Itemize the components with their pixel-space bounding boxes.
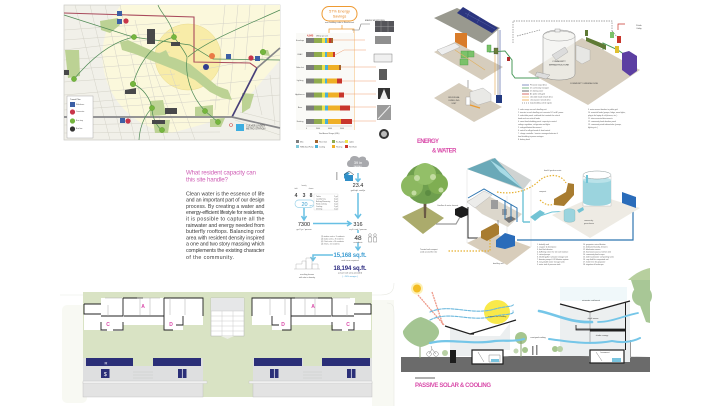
transit routes [64,5,280,140]
panel: site map [64,5,280,140]
unit letters: D [169,322,173,328]
density building icon: resulting homes [300,273,314,276]
diagram labels: compost [539,190,547,193]
lower left roofs: $ [104,372,107,378]
daily water pill [295,200,314,208]
blue pump box [622,192,636,208]
panel: energy savings chart [295,6,394,148]
wiring legend: load-shedding control signals [530,102,552,104]
resident icons [368,234,376,242]
savings bracket [329,25,354,130]
body paragraph: energy-efficient lifestyle for residents, [186,210,264,216]
rainfall cloud icon [347,156,369,168]
cyclist [427,346,438,356]
legend: Hot Water [349,146,357,148]
map street texture [64,5,280,140]
surrounding context [60,283,394,406]
annual water per person: 7300 [298,222,310,228]
energy notes: 9. main nearest breaker to public grid [588,108,618,111]
orange wall unit [455,33,467,48]
body paragraph: Clean water is the essence of life [186,192,265,198]
strategy thumbnails [352,20,394,139]
energy notes: 13. community wind turbine/solar (pumps, [588,123,622,126]
lower right roofs [249,358,372,397]
energy notes: 2. inverter in each dwelling unit converts DC to AC power [518,111,564,114]
section labels: shade canopy [596,335,608,337]
green units [460,45,491,65]
butterfly roof [467,158,531,190]
panel: water calculation flow [294,156,376,279]
community infrastructure tank [535,29,575,80]
lower left roofs [83,358,207,397]
section labels: rainwater catchment [582,299,600,302]
map legend: Commuter [76,110,85,113]
savings pill heading: over building code or Benchmark [325,22,354,24]
unit letters [106,304,350,328]
required roof area: roof area required [341,259,359,262]
annual water per person: gal / yr / person [296,228,312,231]
bars: 4,845 [307,34,314,38]
unit mix list: (4) 3 bdr = 21 residents [321,242,340,246]
battery equipment [466,88,502,108]
water notes [537,243,614,266]
lower floor plane [434,83,502,122]
legend: Cooling [319,146,325,148]
water use table: Drinking [316,208,322,210]
actual roof area [334,266,367,278]
wiring legend: selectable loads network (DC) [530,96,553,98]
diagram labels: Overflow & water harvest [437,204,459,207]
row 3 [306,65,341,70]
wiring legend [522,84,553,104]
brown greywater tank [481,223,499,241]
diagram labels: food & garden waste [544,169,561,172]
dwelling roof with solar panels [434,7,500,43]
water use table: Laundry Day [316,198,326,200]
energy notes: voltage regulation, refrigerator and lights [518,123,550,126]
water use icons: 3 [303,193,306,199]
legend: Heating [336,146,342,148]
metro station label: METRO STATION [246,128,266,130]
dark grey filter box [455,206,468,218]
actual roof area: actual roof area provided [338,272,363,274]
plane labels: INDIVIDUAL [448,96,461,99]
unit letters: A [141,304,145,310]
roof area per person: sq.ft. roof / person [349,228,368,231]
row 5 [306,92,344,98]
trees left [403,317,527,358]
section labels: basement [601,351,610,354]
dwelling system wiring [455,21,625,95]
fixtures [467,191,516,223]
strategy thumbnails: ENERGY MONITORING [365,20,385,22]
chart axis [306,126,352,135]
water use icons [294,184,314,199]
chart axis: 6000 [328,128,332,130]
energy notes [518,108,626,141]
body paragraph: process. By creating a water and [186,204,265,210]
sun rays [418,292,444,325]
water notes: 5. cistern/pumps [537,253,550,256]
rainfall cloud icon: 39 in [354,161,362,165]
legend: Misc [300,142,304,144]
plane labels: Utility [636,27,642,30]
energy notes: 11. interconnected disconnects [588,117,613,120]
central stair and courtyard [211,298,244,339]
water use icons: 4 [295,193,298,199]
plane labels: COMMUNITY GREENHOUSE [570,83,599,85]
upper left units [84,298,203,331]
diagram labels: greenhouse [584,222,594,225]
water use table: Bathing/Showering [316,200,330,203]
inverter controls [494,36,621,61]
energy notes: 1. solar arrays on each dwelling unit [518,108,547,111]
unit mix list [321,235,345,246]
map legend: Bus stop [76,119,83,122]
capacity question heading: What resident capacity can [186,170,257,176]
water notes: 9. water tank & pressure tank [537,263,560,266]
water notes: 16. crop field for composted soil [583,258,609,261]
rainfall yield: 23.4 [353,183,363,189]
required roof area [334,253,367,262]
energy notes: 6. switch for off-grid mode & load control [518,129,551,132]
water notes: 8. non-potable water storage tanks [537,260,565,264]
roof area per person: 316 [353,222,363,228]
energy notes: load shedding to power outages [518,135,544,138]
lower left roofs: R [105,360,108,366]
water use table: 8 gal [334,201,338,203]
rainfall yield [351,183,366,192]
water use icons: 8 [310,193,313,199]
water use icons: shower [309,187,314,190]
blue cistern tank [496,233,515,249]
energy notes: lighting etc.) [588,126,598,129]
diagram labels: used around the site [420,250,437,254]
sun [411,282,423,294]
section labels: courtyard cooling [530,336,546,339]
rainfall yield: gal/sqft. roof/yr [351,189,366,192]
distribution panels [585,30,614,50]
water notes: 18. irrigation of landscape [583,263,604,266]
diagram labels: Treated soil compost [420,248,438,251]
water notes: 3. first flush diverter [537,248,553,251]
map legend [67,96,93,138]
water notes: 6. 20,000 gallon rainwater storage tank [537,256,568,258]
wiring legend: PV power output (DC) [530,84,547,86]
plane labels: Public [636,25,642,27]
energy notes: 4. smart load-shedding panel: capacity to control [518,120,557,123]
community plane [528,38,640,105]
school buildings [64,29,180,124]
water use table: 2 gal [334,208,338,210]
row labels: Solar hot [296,66,304,69]
residents count: residents [354,241,363,244]
right tree [630,280,652,358]
energy notes: 7. charge controller / inverter manages batteries & [518,132,559,135]
capacity question heading: this site handle? [186,176,229,184]
chart axis: 0 [306,128,307,130]
rainfall cloud icon: RAINFALL [354,165,362,168]
annual water per person [296,222,312,231]
body paragraph: rainwater and energy needed from [186,223,265,229]
transit icons [117,11,260,124]
water notes: 11. dedicated laundry, showers [583,246,608,248]
body paragraph: of the community. [186,255,234,261]
metro station label [230,124,266,131]
tree [401,163,448,234]
row 6 [306,106,350,110]
upper right units [252,298,371,331]
daily water pill: gal [310,205,313,207]
courtyard lawn [83,292,372,397]
required roof area: 15,168 sq.ft. [334,253,367,259]
site hedge [628,268,650,280]
purple battery bank [622,51,637,76]
water notes: 17. mulch tree for greywater [583,260,606,264]
heading: passive solar and cooling: PASSIVE SOLAR & COOLING [415,383,491,389]
community center building [576,45,590,64]
row labels: Appliances [295,93,305,96]
water notes: 4. buffering cistern for site soil moisture [537,250,568,254]
parks [65,18,270,133]
water notes: 12. blackwater source [583,248,600,251]
section labels: daylit rooms [588,317,598,320]
legend: HVAC Aux/Pump [300,146,314,148]
body paragraph: it is possible to capture all the [186,216,265,222]
connector lines [333,40,376,121]
legend: Lights [349,140,354,144]
savings pill heading: 57% Energy [329,10,350,14]
row labels: Existing [297,120,303,123]
water use table: 2 gal [334,206,338,208]
text block: resident capacity [186,170,265,261]
water use table: Toilets [316,195,321,198]
body paragraph: area with resident density inspired [186,235,265,241]
water notes: 15. toilet wastewater composting tanks [583,256,614,258]
body paragraph: butterfly rooftops. Balancing roof [186,229,265,235]
panel: site plan [60,283,394,406]
ground [401,356,650,372]
dwelling water floor [467,193,522,227]
unit mix list: (3) studios units = 3 residents [321,235,345,238]
capacity question heading [186,170,257,184]
wiring legend: critical power network (DC) [530,98,551,102]
legend [296,140,357,148]
community plane [552,195,640,238]
row labels: HVAC [297,53,303,56]
plane labels [448,25,642,105]
stop markers [71,34,266,133]
body paragraph [186,192,265,261]
legend: Eq. Appliances [336,140,348,144]
water notes: 1. butterfly roof [537,243,549,246]
small community tank [564,209,575,222]
water notes: 7. booster pumps & UV filtration system [537,258,569,261]
map legend: Rideshare [76,104,84,106]
water use table: 2 gal [334,196,338,198]
chart axis: Total Annual Usage (kWh) [319,132,340,135]
wiring legend: DC community microgrid [530,86,549,90]
body paragraph: complements the existing character [186,248,265,254]
water notes: 13. food waste-source, kitchen sink [583,250,611,254]
panel: energy system diagram [434,7,642,141]
roof area per person [349,222,368,231]
heading: energy and water [417,139,457,154]
diagram labels: community [584,219,593,222]
scale bar [415,377,435,379]
unit mix list: (4) studio units = 8 residents [321,238,344,240]
compost bin [554,183,574,206]
row 7 [306,119,352,124]
savings pill heading [322,6,357,24]
diagram labels [420,169,594,265]
actual roof area: 18,194 sq.ft. [334,266,367,272]
kitchen counter [437,43,460,55]
wiring legend: AC public utility grid [530,92,545,96]
walking radius circles [102,5,280,133]
chart axis: 3000 [316,128,320,130]
plane labels: UNIT [452,103,457,105]
residents count: 48 [354,235,362,242]
right house [560,287,630,363]
row 4 [306,78,342,84]
airflow arrows [430,304,640,343]
daily water pill: 20 [301,202,308,208]
water notes: 10. greywater micro-filtration [583,243,606,246]
solar glow [484,300,510,324]
unit mix list: (8) 2 bdr units = 16 residents [321,240,344,243]
bushes and figures [442,345,563,356]
unit letters: D [281,322,285,328]
plane labels: DWELLING [449,100,460,102]
section labels [488,299,610,354]
density building icon: with site in density [299,276,315,279]
heading: energy and water: ENERGY [417,139,439,145]
lower floor [467,232,531,265]
blue pipework [436,189,633,240]
row labels: Envelope [296,40,304,42]
energy notes: 8. battery bank [518,138,530,141]
row labels: Lighting [297,79,303,82]
savings pill heading: Savings [333,14,346,18]
pump [577,207,584,213]
water use icons: laundry [302,184,307,187]
building frame [467,170,531,265]
body paragraph: and an important part of our design [186,198,265,204]
energy notes: 12. community loads breaker panel [588,120,617,123]
legend: Heat Gain [319,140,327,144]
bars: kWh/yr per unit [316,34,329,38]
water use table: Cooking [316,206,322,208]
water notes: 2. scupper & downspout [537,246,557,248]
heading: energy and water: & WATER [432,148,457,154]
panel: water system diagram [401,158,640,266]
energy notes: 3. selectable panel: sub-feed that controls the critical [518,114,560,117]
chart axis: 9000 [340,128,344,130]
metro station label: CULVER LINDEN [246,124,265,128]
unit letters: C [346,322,350,328]
wiring legend: DC battery power [530,90,544,92]
flow arrows [302,173,361,260]
water notes: 14. community food scraps [583,253,605,256]
community infrastructure tank: COMMUNITY [552,61,566,63]
diagram labels: dwelling unit [493,262,504,265]
compost dotted paths [447,176,566,251]
row 2 [306,52,335,57]
water use table: 4 gal [334,198,338,200]
community infrastructure tank: INFRASTRUCTURE [549,64,570,66]
residents count [354,235,363,244]
section labels: summer sun shading [488,316,506,318]
row 1 [306,38,333,43]
unit letters: C [106,322,110,328]
energy notes: 5. sub-grid-limited disconnect [518,126,542,129]
row labels [295,40,305,123]
pump filter [530,210,545,221]
map legend: Bus line [76,128,82,130]
collection icons [336,171,354,181]
actual roof area: ( ~20% margin ) [342,275,358,278]
water use icons: toilet [294,187,298,190]
body paragraph: a one and two story massing which [186,242,265,248]
map legend: Transit Plan [70,98,81,101]
bars [296,33,354,130]
energy notes: loads and non-critical loads [518,117,540,120]
row labels: Base [298,107,302,109]
community cistern [583,171,611,206]
energy notes: plug-in for laptop & cell phones, etc.) [588,114,618,117]
dwelling floor plane [434,42,503,80]
panel: passive solar and cooling section [401,268,652,378]
left house [445,320,516,364]
density building icon [294,258,320,279]
unit letters: A [311,304,315,310]
water use table: Hand washing [316,204,327,206]
energy notes: 10. essential loads (pumps, fridge, some lights, [588,111,626,114]
water use table: 2 gal [334,204,338,206]
water use table [314,194,338,210]
